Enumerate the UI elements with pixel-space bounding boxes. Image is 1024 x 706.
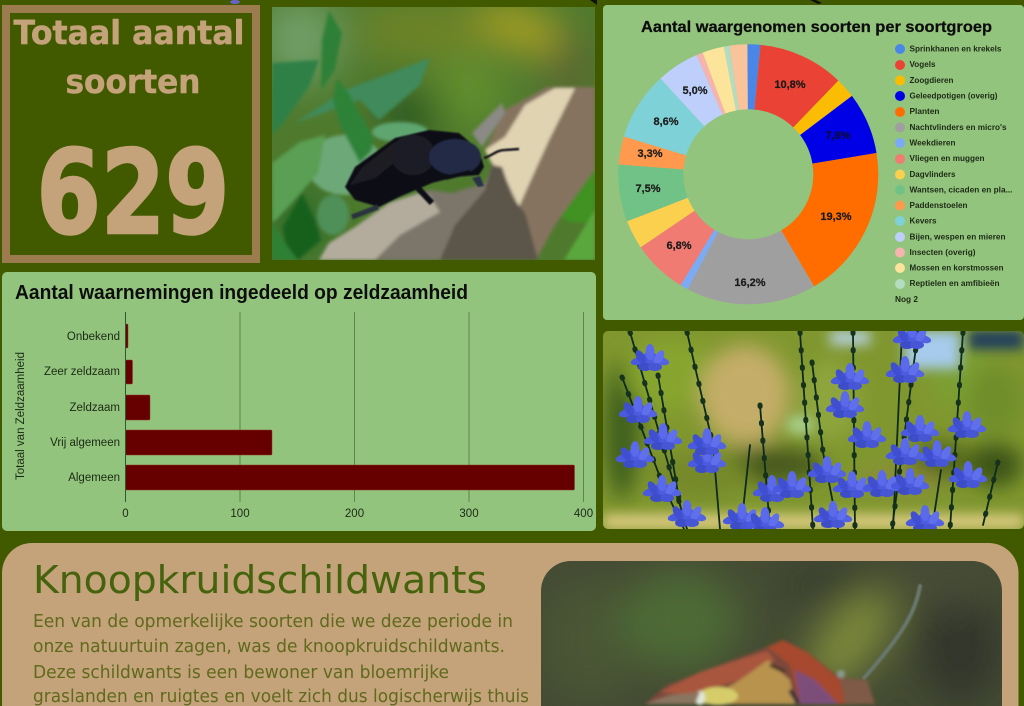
category labels: Onbekend: [67, 331, 120, 343]
donut percentage labels: 16,2%: [734, 277, 766, 289]
donut percentage labels: [635, 79, 852, 289]
chart grid lines: [240, 312, 584, 502]
donut legend: Zoogdieren: [910, 76, 954, 85]
donut legend: Weekdieren: [910, 138, 956, 148]
donut percentage labels: 7,5%: [635, 183, 661, 195]
heading: total species: soorten: [66, 62, 200, 101]
panel: total species count: [6, 9, 256, 261]
donut legend: Nachtvlinders en micro's: [910, 123, 1007, 132]
donut legend: Vogels: [910, 60, 936, 69]
antenna: [864, 586, 920, 678]
donut percentage labels: 7,8%: [825, 130, 851, 142]
photo fragments along top edge: [230, 0, 822, 5]
buds on stems: [622, 332, 998, 529]
donut legend: Insecten (overig): [910, 248, 976, 257]
body text: onze natuurtuin zagen, was de knoopkruidschildwants.: [33, 636, 505, 657]
heading: donut chart title: Aantal waargenomen soorten per soortgroep: [641, 19, 992, 36]
photo: shield bug: [541, 561, 1002, 706]
donut percentage labels: 10,8%: [774, 79, 806, 91]
donut chart: [651, 77, 846, 272]
donut legend: Geleedpotigen (overig): [910, 92, 998, 100]
donut percentage labels: 6,8%: [666, 240, 692, 252]
donut percentage labels: 8,6%: [653, 116, 679, 128]
heading: total species: [14, 13, 244, 101]
value axis labels: 0: [122, 508, 129, 520]
photo: blue chicory flowers: [603, 322, 1024, 534]
heading: total species: Totaal aantal: [14, 13, 244, 52]
heading: species name: Knoopkruidschildwants: [33, 558, 487, 602]
value axis labels: 400: [574, 508, 593, 520]
blossoms: [615, 322, 988, 534]
donut percentage labels: 5,0%: [682, 85, 708, 97]
value axis labels: 200: [345, 508, 364, 520]
beetle: [345, 130, 519, 217]
donut legend: Vliegen en muggen: [910, 154, 985, 163]
donut legend: Nog 2: [895, 295, 919, 304]
panel: bar chart observations by rarity: [2, 272, 596, 531]
value axis labels: [122, 508, 593, 520]
donut legend: Kevers: [910, 216, 937, 226]
donut legend: Mossen en korstmossen: [910, 264, 1004, 272]
panel: featured species Knoopkruidschildwants: [2, 543, 1018, 706]
category labels: Zeldzaam: [70, 402, 120, 414]
donut legend: Planten: [910, 107, 940, 116]
donut legend: Bijen, wespen en mieren: [910, 232, 1006, 242]
panel: donut chart species per group: [603, 5, 1024, 320]
chart baseline: [124, 312, 126, 502]
photo: black beetle on dead wood: [260, 0, 595, 260]
donut legend: Wantsen, cicaden en pla...: [910, 186, 1012, 194]
bug body: [645, 640, 875, 705]
value axis labels: 300: [459, 508, 479, 520]
donut legend: Dagvlinders: [910, 170, 956, 179]
axis title: Totaal van Zeldzaamheid: [15, 352, 27, 480]
category labels: Algemeen: [68, 472, 120, 484]
category labels: Zeer zeldzaam: [44, 366, 120, 378]
donut legend: Sprinkhanen en krekels: [910, 44, 1002, 54]
category labels: Vrij algemeen: [50, 437, 120, 449]
body text: Deze schildwants is een bewoner van bloemrijke: [33, 662, 449, 683]
category labels: [44, 331, 120, 484]
heading: bar chart title: Aantal waarnemingen ingedeeld op zeldzaamheid: [15, 282, 468, 304]
body text: Een van de opmerkelijke soorten die we deze periode in: [33, 611, 513, 632]
body text: [33, 611, 529, 706]
donut legend: Paddenstoelen: [910, 201, 968, 210]
stems: [622, 332, 998, 529]
donut legend: Reptielen en amfibieën: [910, 279, 1000, 288]
value axis labels: 100: [230, 508, 250, 520]
wood: [319, 87, 595, 260]
horizontal bars: [126, 324, 574, 490]
donut legend: [895, 44, 1012, 304]
number: 629 species: 629: [36, 126, 230, 261]
donut percentage labels: 19,3%: [820, 211, 852, 223]
donut percentage labels: 3,3%: [637, 148, 663, 160]
